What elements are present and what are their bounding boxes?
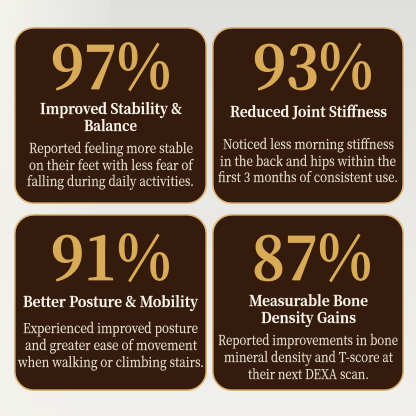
stat: 93%: 93% xyxy=(253,18,373,107)
panel: joint stiffness xyxy=(213,18,403,203)
heading: stability xyxy=(40,98,182,136)
text: stability description: on their feet with less fear of xyxy=(29,154,194,174)
text: posture description: when walking or climbing stairs. xyxy=(17,351,204,371)
text: joint stiffness description xyxy=(218,133,398,186)
text: stability description xyxy=(27,137,194,190)
text: posture description: and greater ease of movement xyxy=(25,334,197,354)
heading: bone density: Density Gains xyxy=(261,307,356,328)
panel: bone density xyxy=(213,209,403,390)
heading: bone density: Measurable Bone xyxy=(249,290,368,311)
heading: stability: Improved Stability & xyxy=(40,98,182,119)
heading: stability: Balance xyxy=(84,115,137,136)
stat: 91%: 91% xyxy=(51,209,171,298)
text: bone density description xyxy=(218,329,398,383)
stat: 87%: 87% xyxy=(252,209,372,298)
text: posture description xyxy=(17,317,204,371)
heading: posture: Better Posture & Mobility xyxy=(23,291,199,312)
panel: stability xyxy=(15,18,206,203)
heading: bone density xyxy=(249,290,368,328)
text: bone density description: their next DEXA scan. xyxy=(248,363,369,383)
text: posture description: Experienced improved posture xyxy=(23,317,198,337)
stat: 97%: 97% xyxy=(51,18,171,107)
panel: posture xyxy=(15,209,206,390)
heading: joint stiffness: Reduced Joint Stiffness xyxy=(230,101,387,122)
text: stability description: falling during daily activities. xyxy=(27,170,194,190)
text: stability description: Reported feeling more stable xyxy=(29,137,193,157)
